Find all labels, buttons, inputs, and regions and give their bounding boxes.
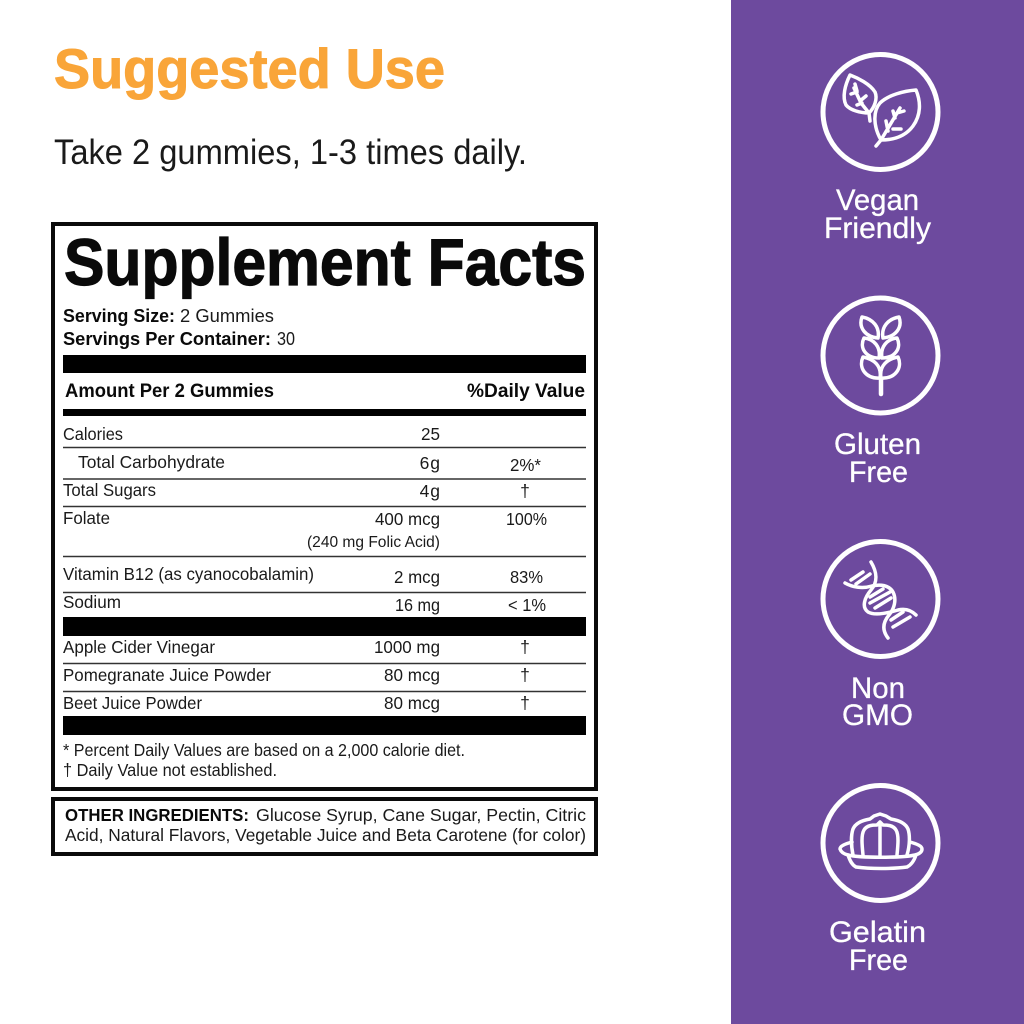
icon: gelatin mold	[823, 786, 938, 900]
row: folate: 400 mcg	[375, 509, 440, 529]
badge: gluten free: Gluten	[834, 428, 921, 461]
usage instruction text: Take 2 gummies, 1-3 times daily.	[54, 133, 527, 172]
heading: Supplement Facts: Supplement Facts	[64, 225, 586, 299]
badge: gluten free: Free	[849, 456, 908, 489]
badge: vegan friendly: Friendly	[824, 212, 931, 245]
servings per container: Servings Per Container:	[63, 328, 271, 349]
row: pomegranate juice powder: 80 mcg	[384, 665, 440, 685]
badge: non GMO: GMO	[842, 699, 913, 732]
badge: gelatin free: Gelatin	[829, 916, 926, 949]
badge: gluten free	[823, 298, 938, 489]
column header: percent daily value: %Daily Value	[467, 381, 585, 402]
row: vitamin B12	[63, 564, 543, 587]
row: total carbohydrate	[78, 452, 541, 475]
row: calories: Calories	[63, 424, 123, 444]
row: apple cider vinegar: Apple Cider Vinegar	[63, 637, 215, 657]
row: pomegranate juice powder: Pomegranate Juice Powder	[63, 665, 271, 685]
row: total sugars: Total Sugars	[63, 480, 156, 500]
row: calories	[63, 424, 440, 444]
serving size: Serving Size:	[63, 305, 175, 326]
panel: purple badges sidebar	[731, 0, 1024, 1024]
row: vitamin B12: 83%	[510, 567, 543, 587]
row: vitamin B12: 2 mcg	[394, 567, 440, 587]
badge: gelatin free	[823, 786, 938, 977]
badge: vegan friendly: Vegan	[836, 184, 919, 217]
icon: DNA helix	[823, 542, 938, 656]
panel: other ingredients	[53, 799, 596, 854]
panel: other ingredients: Glucose Syrup, Cane Sugar, Pectin, Citric	[256, 805, 586, 825]
row: total sugars: †	[520, 481, 530, 501]
panel: supplement facts table	[53, 224, 596, 789]
row: beet juice powder: †	[520, 693, 530, 713]
row: calories: 25	[421, 424, 440, 444]
row: pomegranate juice powder	[63, 665, 530, 685]
footnotes	[63, 740, 465, 780]
row: pomegranate juice powder: †	[520, 665, 530, 685]
row: folate: Folate	[63, 508, 110, 528]
row: folate	[63, 508, 547, 551]
row: beet juice powder	[63, 693, 530, 713]
servings per container: 30	[277, 328, 295, 349]
row: beet juice powder: 80 mcg	[384, 693, 440, 713]
badge: vegan friendly	[823, 54, 938, 245]
row: total carbohydrate: 2%*	[510, 455, 541, 475]
row: total sugars: 4 g	[420, 481, 440, 501]
panel: other ingredients: Acid, Natural Flavors, Vegetable Juice and Beta Carotene (for color)	[65, 825, 586, 845]
badge: gelatin free: Free	[849, 944, 908, 977]
panel: other ingredients: OTHER INGREDIENTS:	[65, 805, 249, 825]
row: total carbohydrate: 6 g	[420, 453, 440, 473]
icon: leaves	[823, 54, 938, 170]
row: folate: 100%	[506, 509, 547, 529]
row: vitamin B12: Vitamin B12 (as cyanocobalamin)	[63, 564, 314, 584]
row: total carbohydrate: Total Carbohydrate	[78, 452, 225, 472]
badge: non GMO: Non	[851, 672, 905, 705]
row: beet juice powder: Beet Juice Powder	[63, 693, 202, 713]
row: folate: (240 mg Folic Acid)	[307, 534, 440, 551]
serving size	[63, 305, 274, 326]
row: sodium: < 1%	[508, 595, 546, 615]
row: total sugars	[63, 480, 530, 501]
icon: wheat	[823, 298, 938, 413]
row: apple cider vinegar: 1000 mg	[374, 637, 440, 657]
footnotes: † Daily Value not established.	[63, 760, 277, 780]
row: sodium: 16 mg	[395, 595, 440, 615]
serving size: 2 Gummies	[180, 305, 274, 326]
title: Suggested Use: Suggested Use	[54, 37, 445, 100]
column header: amount per 2 gummies: Amount Per 2 Gummies	[65, 381, 274, 402]
row: sodium	[63, 592, 546, 615]
row: sodium: Sodium	[63, 592, 121, 612]
row: apple cider vinegar	[63, 637, 530, 657]
row: apple cider vinegar: †	[520, 637, 530, 657]
badge: non GMO	[823, 542, 938, 732]
footnotes: * Percent Daily Values are based on a 2,000 calorie diet.	[63, 740, 465, 760]
